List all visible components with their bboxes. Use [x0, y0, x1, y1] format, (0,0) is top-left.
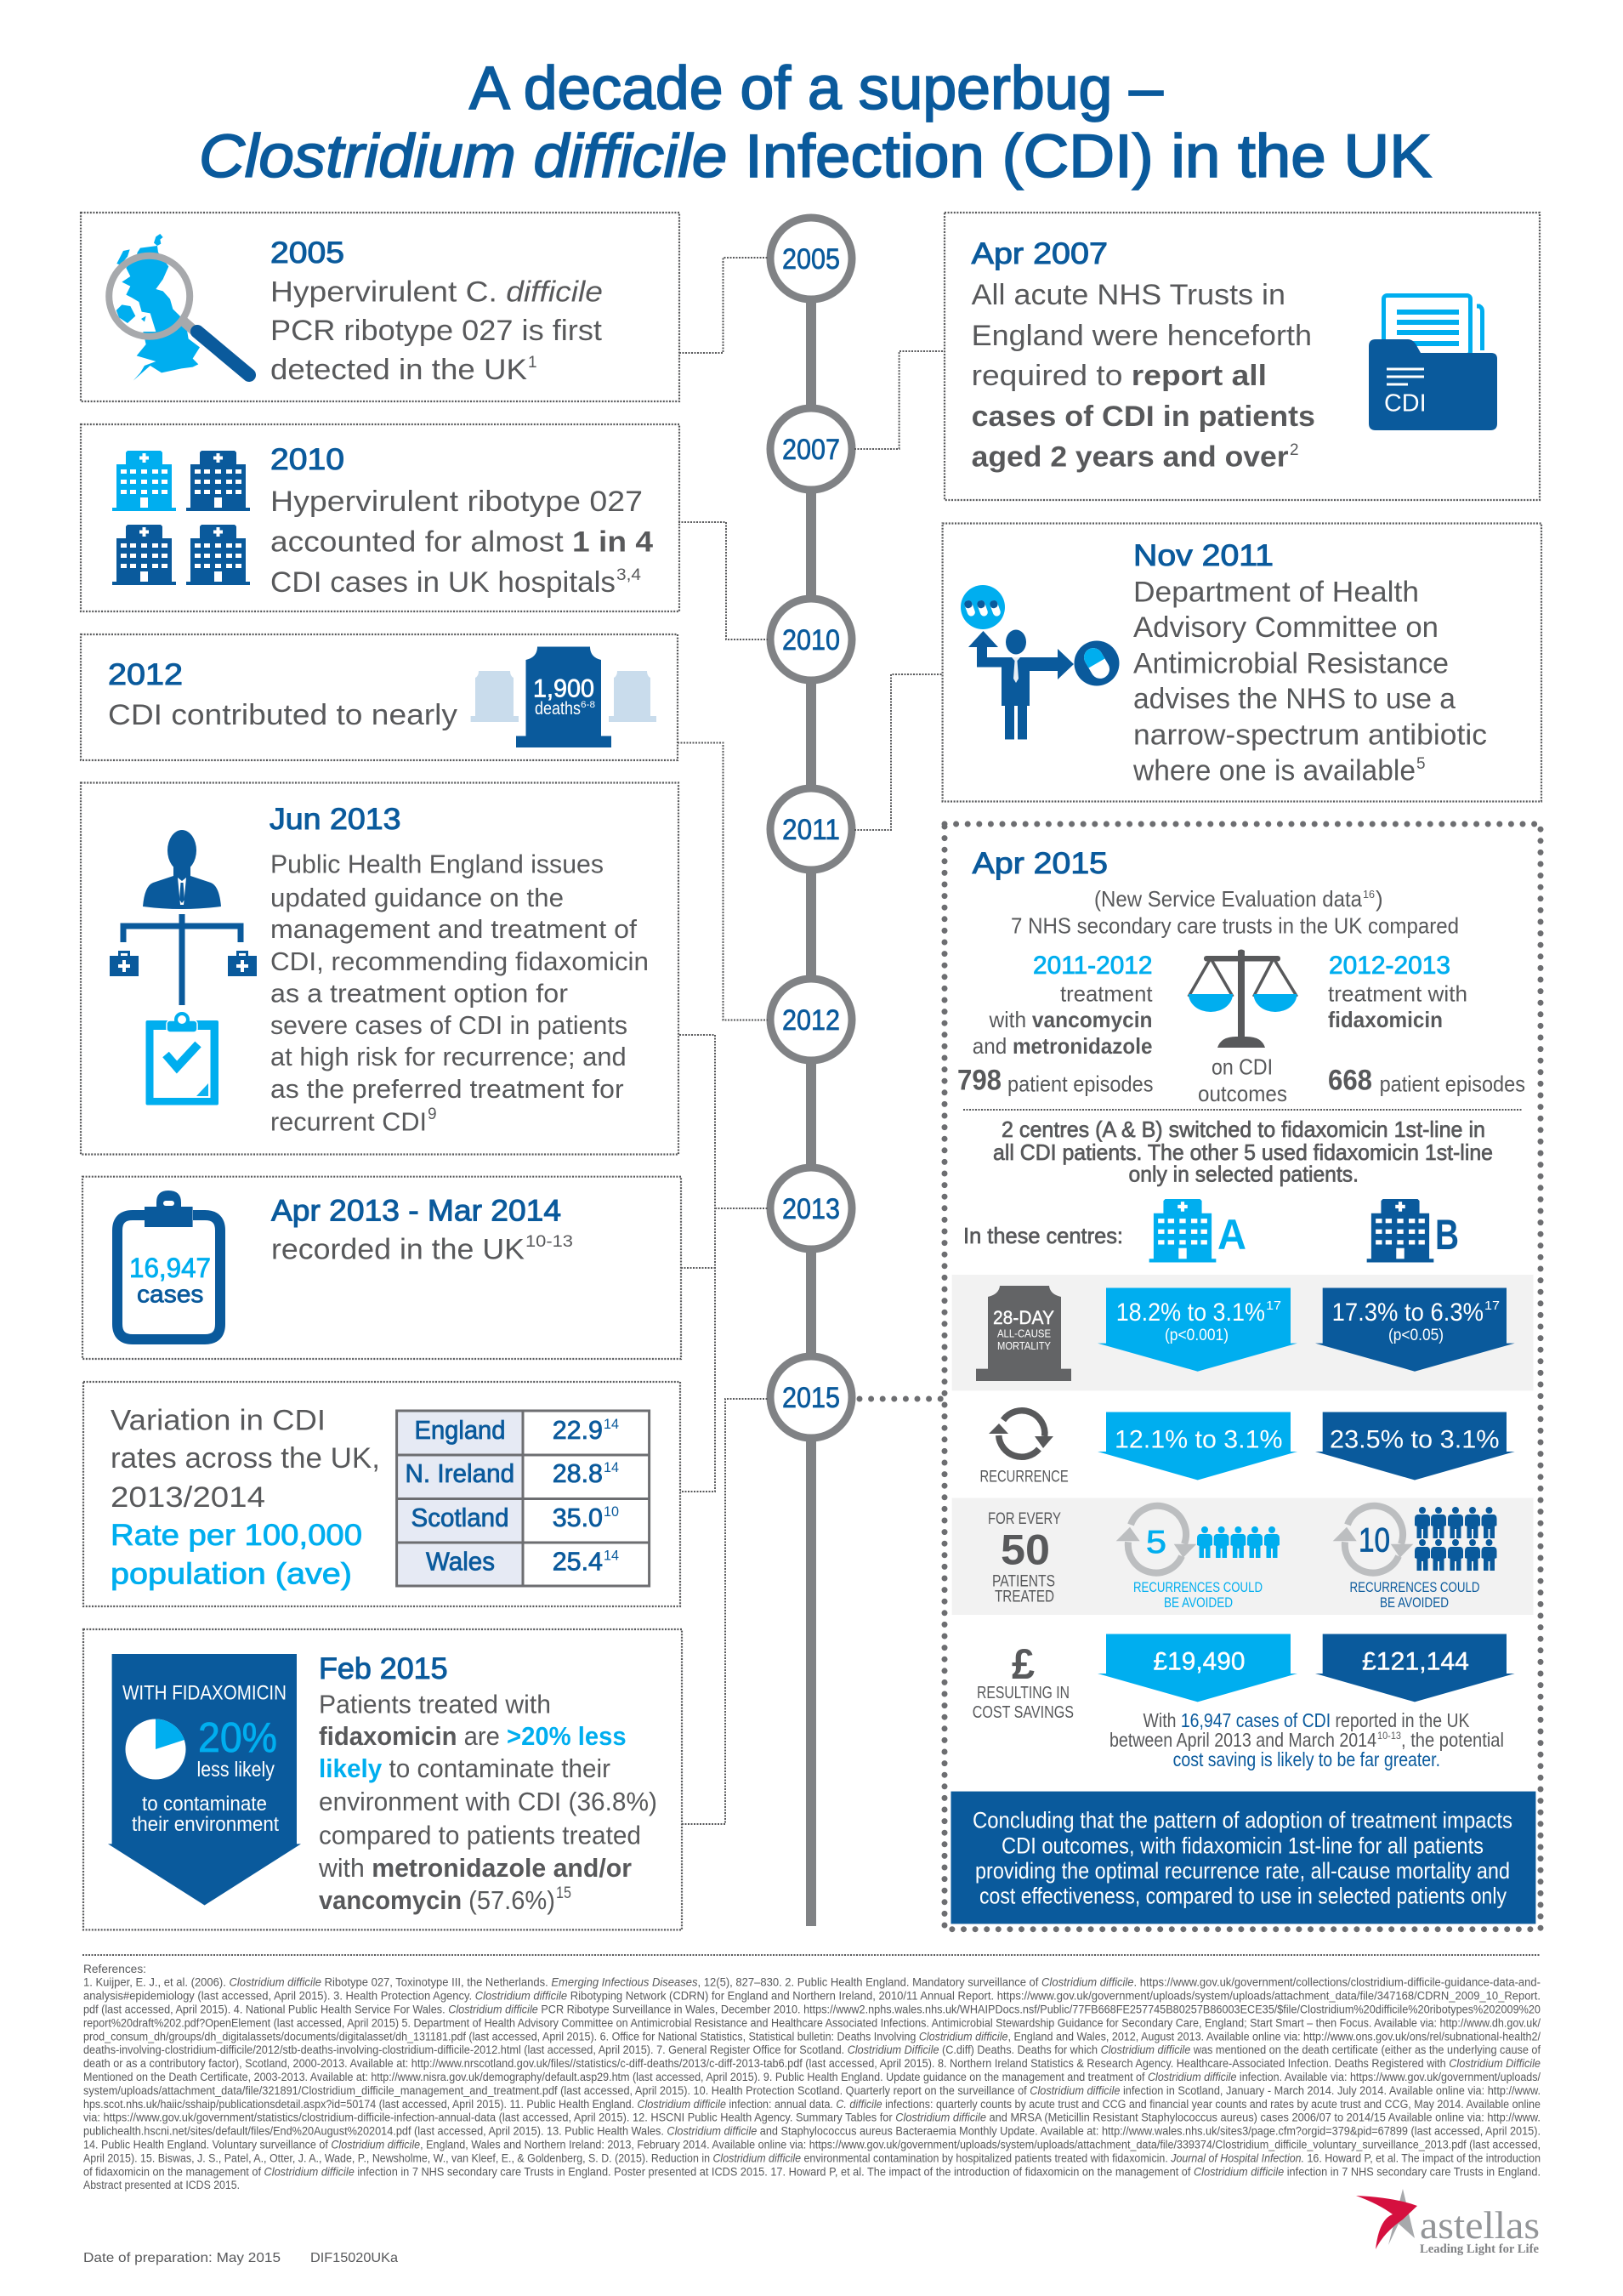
- heading: Apr 2007: Apr 2007: [972, 237, 1108, 270]
- text block: fidaxomicin are >20% less: [319, 1721, 627, 1751]
- panel: Jun 2013: [81, 782, 678, 1155]
- panel: variation in CDI rates: [83, 1382, 680, 1606]
- references: prod_consum_dh/groups/dh_digitalassets/documents/digitalasset/dh_131181.pdf (last accessed, April 2015). 6. Office for National Statistics, Statistical bulletin: Deaths Involving Clostridium difficile, England and Wales, 2012, August 2013. Available online via: http://www.ons.gov.uk/ons/rel/subnational-health2/: [83, 2030, 1541, 2043]
- references: 1. Kuijper, E. J., et al. (2006). Clostridium difficile Ribotype 027, Toxinotype III, the Netherlands. Emerging Infectious Diseases, 12(5), 827–830. 2. Public Health England. Mandatory surveillance of Clostridium difficile. https://www.gov.uk/government/collections/clostridium-difficile-guidance-data-and-: [83, 1976, 1541, 1989]
- arrow: centre B mortality: 17.3% to 6.3%: [1332, 1299, 1484, 1327]
- text block: CDI, recommending fidaxomicin: [270, 946, 649, 976]
- icon: hospital B: [1367, 1199, 1459, 1262]
- arrow: centre B recurrence: 23.5% to 3.1%: [1330, 1426, 1500, 1454]
- panel: 2010: [81, 424, 679, 611]
- label: recurrences could be avoided B: [1350, 1579, 1479, 1611]
- text block: All acute NHS Trusts in: [972, 279, 1285, 311]
- table: rates by nation: Scotland: [411, 1503, 508, 1532]
- heading: Apr 2013 - Mar 2014: Apr 2013 - Mar 2014: [271, 1195, 561, 1228]
- icon: hospital B: B: [1435, 1211, 1459, 1259]
- text: on CDI outcomes: outcomes: [1198, 1081, 1287, 1106]
- label: resulting in cost savings: RESULTING IN: [977, 1684, 1070, 1702]
- text: 2012-2013 comparator: fidaxomicin: [1328, 1007, 1443, 1032]
- icon: four hospitals: [112, 451, 250, 585]
- text block: Advisory Committee on: [1133, 611, 1439, 644]
- text block: Hypervirulent C. difficile: [270, 276, 603, 309]
- timeline: 2011: [782, 814, 840, 846]
- text: 2012-2013 comparator: [1328, 952, 1525, 1097]
- text block: 2013/2014: [111, 1481, 265, 1514]
- timeline: 2013: [782, 1193, 840, 1225]
- table: rates by nation: 28.8: [553, 1458, 603, 1488]
- text block: where one is available: [1132, 755, 1416, 787]
- icon: hospital A: A: [1217, 1211, 1246, 1259]
- table: rates by nation: [397, 1411, 650, 1586]
- text block: likely to contaminate their: [319, 1753, 610, 1783]
- callout: conclusion: Concluding that the pattern of adoption of treatment impacts: [973, 1808, 1512, 1833]
- text block: severe cases of CDI in patients: [270, 1010, 627, 1040]
- text block: cases of CDI in patients: [972, 401, 1315, 433]
- text: cost saving note: cost saving is likely to be far greater.: [1173, 1748, 1440, 1770]
- panel: Feb 2015: [83, 1629, 682, 1929]
- references: report%20draft%202.pdf?OpenElement (last accessed, April 2015) 5. Department of Health Advisory Committee on Antimicrobial Resistance and Healthcare Associated Infections. Antimicrobial Stewardship Guidance for Secondary Care, England; Start Smart – then Focus. Available via: http://www.dh.gov.uk/: [83, 2016, 1541, 2029]
- text block: compared to patients treated: [319, 1820, 641, 1850]
- table: rates by nation: 14: [604, 1459, 619, 1475]
- heading: Apr 2015: Apr 2015: [973, 847, 1108, 880]
- references: of fidaxomicin on the management of Clostridium difficile infection in 7 NHS secondary care Trusts in England. Poster presented at ICDS 2015. 17. Howard P, et al. The impact of the introduction of fidaxomicin on the management of Clostridium difficile infection in 7 NHS secondary care Trusts in England.: [83, 2165, 1541, 2178]
- icon: CDI folder: [1369, 296, 1497, 430]
- icon: hospital A: [1149, 1199, 1246, 1262]
- heading: Nov 2011: Nov 2011: [1133, 539, 1274, 572]
- references: April 2015). 15. Biswas, J. S., Patel, A., Otter, J. A., Wade, P., Newsholme, W., van Kleef, E., & Goldenberg, S. D. (2015). Reduction in Clostridium difficile environmental contamination by hospitalized patients treated with fidaxomicin. Journal of Hospital Infection. 16. Howard P, et al. The impact of the introduction: [83, 2151, 1541, 2164]
- icon: tombstones with 1,900 deaths: deaths: [535, 699, 581, 719]
- icon: tombstone: 28-DAY: [993, 1307, 1054, 1328]
- text: study description: ): [1376, 886, 1383, 912]
- icon: 10 recurrences avoided: [1333, 1506, 1496, 1573]
- arrow: centre B savings: £121,144: [1362, 1648, 1469, 1675]
- references: 14. Public Health England. Voluntary surveillance of Clostridium difficile, England, Wales and Northern Ireland: 2013, February 2014. Available online via: https://www.gov.uk/government/uploads/system/uploads/attachment_data/file/339374/Clostridium_difficile_voluntary_surveillance_2013.pdf (last accessed,: [83, 2138, 1541, 2151]
- callout: with fidaxomicin arrow: 20%: [198, 1715, 277, 1761]
- icon: tombstone: MORTALITY: [997, 1339, 1051, 1352]
- text: on CDI outcomes: [1198, 1054, 1287, 1106]
- text: for every 50 patients treated: TREATED: [995, 1588, 1054, 1606]
- references: [83, 1963, 1541, 2191]
- label: recurrences could be avoided B: BE AVOIDED: [1380, 1594, 1449, 1611]
- text: 2011-2012 comparator: 798: [957, 1064, 1002, 1096]
- row: recurrence: [979, 1411, 1515, 1486]
- arrow: centre A mortality: (p<0.001): [1165, 1327, 1229, 1344]
- references: Abstract presented at ICDS 2015.: [83, 2179, 240, 2191]
- text block: England were henceforth: [972, 320, 1312, 352]
- text block: CDI cases in UK hospitals: [270, 566, 616, 599]
- text block: detected in the UK: [270, 354, 527, 386]
- panel: Apr 2015 service evaluation: [945, 824, 1541, 1929]
- label: recurrences could be avoided A: RECURRENCES COULD: [1133, 1579, 1263, 1595]
- text: 2011-2012 comparator: treatment: [1060, 980, 1153, 1006]
- table: rates by nation: 14: [604, 1416, 619, 1432]
- text block: 15: [556, 1884, 571, 1902]
- label: resulting in cost savings: COST SAVINGS: [973, 1703, 1074, 1722]
- footer: date of preparation: Date of preparation: May 2015: [83, 2251, 281, 2265]
- references: pdf (last accessed, April 2015). 4. National Public Health Service For Wales. Clostridium difficile PCR Ribotype Surveillance in Wales, December 2010. https://www2.nphs.wales.nhs.uk/WHAIPDocs.nsf/Public/77FB668FE257745B80257B86003ECE35/$file/Clostridium%20difficile%20ribotypes%202009%20: [83, 2003, 1541, 2015]
- table: rates by nation: 14: [604, 1548, 619, 1563]
- text block: [111, 1405, 380, 1591]
- row: 28-day all-cause mortality: [952, 1275, 1534, 1390]
- label: recurrences could be avoided A: [1133, 1579, 1263, 1611]
- logo: astellas: astellas: [1420, 2203, 1540, 2247]
- text block: required to report all: [972, 360, 1267, 392]
- text block: 9: [428, 1105, 437, 1123]
- icon: man choosing between antibiotics: [961, 585, 1119, 740]
- text: for every 50 patients treated: PATIENTS: [992, 1573, 1055, 1590]
- text: study description: (New Service Evaluation data: [1094, 886, 1362, 912]
- text block: [270, 849, 649, 1137]
- table: rates by nation: 10: [604, 1503, 619, 1520]
- text: cost saving note: 10-13: [1377, 1730, 1401, 1742]
- text: cost saving note: With 16,947 cases of CDI reported in the UK: [1143, 1709, 1470, 1731]
- arrow: centre A mortality: 18.2% to 3.1%: [1116, 1299, 1265, 1327]
- text block: 1: [528, 354, 537, 372]
- icon: tombstone: ALL-CAUSE: [997, 1327, 1051, 1340]
- text: in these centres: In these centres:: [963, 1223, 1123, 1248]
- timeline: 2015: [782, 1382, 840, 1414]
- text: 2 centres switched: all CDI patients. The other 5 used fidaxomicin 1st-line: [993, 1139, 1493, 1165]
- text block: Patients treated with: [319, 1690, 551, 1719]
- timeline: 2007: [782, 434, 840, 466]
- text: for every 50 patients treated: 50: [1001, 1526, 1050, 1573]
- text block: as the preferred treatment for: [270, 1074, 624, 1104]
- text: 2012-2013 comparator: 668: [1328, 1064, 1372, 1096]
- icon: clipboard with 16,947 cases: 16,947: [129, 1253, 211, 1283]
- icon: tombstones with 1,900 deaths: 6-8: [581, 700, 595, 710]
- text: 2012-2013 comparator: patient episodes: [1380, 1071, 1525, 1097]
- title: [199, 55, 1432, 190]
- arrow: centre B mortality: 17: [1484, 1299, 1500, 1313]
- text: cost saving note: between April 2013 and March 2014: [1109, 1729, 1376, 1751]
- text block: [318, 1690, 657, 1915]
- arrow: centre A savings: £19,490: [1153, 1648, 1245, 1675]
- text: study description: 7 NHS secondary care trusts in the UK compared: [1011, 913, 1459, 939]
- text block: accounted for almost 1 in 4: [270, 526, 653, 558]
- text: recorded in the UK: recorded in the UK: [271, 1234, 525, 1266]
- table: rates by nation: 35.0: [553, 1503, 603, 1532]
- text block: recurrent CDI: [270, 1107, 427, 1137]
- text block: management and treatment of: [270, 914, 637, 944]
- text block: [1132, 577, 1487, 787]
- callout: conclusion: cost effectiveness, compared to use in selected patients only: [979, 1883, 1507, 1908]
- arrow: centre A mortality: [1098, 1287, 1297, 1372]
- text block: at high risk for recurrence; and: [270, 1042, 627, 1071]
- panel: Nov 2011: [943, 524, 1541, 801]
- timeline: 2012: [782, 1004, 840, 1037]
- text block: advises the NHS to use a: [1133, 683, 1456, 715]
- table: rates by nation: 22.9: [553, 1415, 603, 1445]
- timeline: 2005: [782, 243, 840, 276]
- text: for every 50 patients treated: FOR EVERY: [988, 1510, 1061, 1528]
- text: CDI contributed to nearly: CDI contributed to nearly: [108, 699, 457, 731]
- text block: rates across the UK,: [111, 1442, 380, 1475]
- table: rates by nation: Wales: [426, 1546, 495, 1577]
- text: 2011-2012 comparator: with vancomycin: [989, 1007, 1153, 1032]
- arrow: centre B mortality: [1315, 1287, 1515, 1372]
- text: 2 centres switched: [993, 1117, 1493, 1187]
- icon: recurrence cycle: [989, 1411, 1053, 1457]
- text block: vancomycin (57.6%): [319, 1885, 555, 1915]
- text: 2011-2012 comparator: and metronidazole: [973, 1033, 1153, 1059]
- arrow: centre A recurrence: 12.1% to 3.1%: [1115, 1426, 1282, 1454]
- icon: CDI folder: CDI: [1384, 389, 1427, 417]
- table: rates by nation: 25.4: [553, 1546, 603, 1577]
- logo: astellas: Leading Light for Life: [1420, 2242, 1539, 2256]
- icon: pound sign: £: [1012, 1640, 1035, 1688]
- logo: astellas: [1356, 2189, 1540, 2256]
- text: recorded in the UK: 10-13: [525, 1233, 573, 1251]
- table: rates by nation: England: [415, 1415, 505, 1445]
- table: rates by nation: N. Ireland: [405, 1458, 514, 1488]
- icon: 10 recurrences avoided: 10: [1359, 1522, 1390, 1560]
- callout: with fidaxomicin arrow: WITH FIDAXOMICIN: [122, 1682, 287, 1704]
- icon: balance scales: [1189, 949, 1297, 1048]
- text: 2 centres switched: 2 centres (A & B) switched to fidaxomicin 1st-line in: [1002, 1117, 1485, 1142]
- text: 2011-2012 comparator: [957, 952, 1153, 1097]
- label: resulting in cost savings: [973, 1684, 1074, 1722]
- references: system/uploads/attachment_data/file/321891/Clostridium_difficile_management_and_treatment.pdf (last accessed, April 2015). 10. Health Protection Scotland. Quarterly report on the surveillance of Clostridium difficile infection in Scotland, January - March 2014. July 2014. Available online via: http://www.: [83, 2084, 1541, 2097]
- heading: Feb 2015: Feb 2015: [319, 1652, 448, 1685]
- text block: 3,4: [616, 566, 641, 584]
- panel: Apr 2007: [945, 213, 1540, 500]
- references: analysis#epidemiology (last accessed, April 2015). 3. Health Protection Agency. Clostridium difficile Ribotyping Network (CDRN) for England and Northern Ireland, 2010/11 Annual Report. https://www.gov.uk/government/uploads/system/uploads/attachment_data/file/347168/CDRN_2009_10_Report.: [83, 1990, 1541, 2003]
- arrow: centre A mortality: 17: [1266, 1299, 1281, 1313]
- heading: Jun 2013: Jun 2013: [270, 803, 401, 836]
- text: study description: [1011, 886, 1459, 939]
- callout: conclusion: CDI outcomes, with fidaxomicin 1st-line for all patients: [1002, 1833, 1484, 1859]
- text block: as a treatment option for: [270, 979, 568, 1009]
- text block: Antimicrobial Resistance: [1133, 648, 1449, 680]
- text block: environment with CDI (36.8%): [319, 1787, 657, 1816]
- text block: Public Health England issues: [270, 849, 604, 879]
- icon: 5 recurrences avoided: 5: [1146, 1525, 1166, 1560]
- text block: 5: [1416, 755, 1426, 773]
- text: 2012-2013 comparator: treatment with: [1328, 980, 1467, 1006]
- text block: Hypervirulent ribotype 027: [270, 486, 643, 518]
- references: publichealth.hscni.net/sites/default/files/End%20August%202014.pdf (last accessed, April 2015). 13. Public Health Wales. Clostridium difficile and Staphylococcus aureus Bacteraemia Monthly Update. Available at: http://www.wales.nhs.uk/sites3/page.cfm?orgid=379&pid=67899 (last accessed, April 2015).: [83, 2125, 1541, 2138]
- arrow: centre B savings: [1315, 1634, 1515, 1702]
- callout: with fidaxomicin arrow: their environment: [132, 1813, 279, 1836]
- references: death or as a contributory factor), Scotland, 2000-2013. Available at: http://www.nrscotland.gov.uk/files//statistics/c-diff-deaths/2013/c-diff-2013-tab6.pdf (last accessed, April 2015). 8. Northern Ireland Statistics & Research Agency. Healthcare-Associated Infection. Deaths Registered with Clostridium Difficile: [83, 2057, 1541, 2070]
- text: 2011-2012 comparator: 2011-2012: [1033, 952, 1153, 980]
- text block: updated guidance on the: [270, 883, 564, 912]
- text: on CDI outcomes: on CDI: [1212, 1054, 1273, 1080]
- title: A decade of a superbug –: [469, 55, 1164, 122]
- icon: clipboard with 16,947 cases: [117, 1191, 220, 1339]
- callout: with fidaxomicin arrow: to contaminate: [142, 1793, 267, 1816]
- text block: aged 2 years and over: [972, 440, 1289, 473]
- text block: PCR ribotype 027 is first: [270, 315, 603, 347]
- arrow: centre B recurrence: [1315, 1412, 1515, 1480]
- row: recurrences avoided per 50 patients: [952, 1498, 1534, 1615]
- panel: 2012: [81, 634, 678, 760]
- icon: tombstones with 1,900 deaths: [471, 646, 656, 747]
- arrow: centre A recurrence: [1098, 1412, 1297, 1480]
- callout: conclusion: providing the optimal recurrence rate, all-cause mortality and: [975, 1858, 1510, 1884]
- text block: [270, 486, 653, 599]
- text: 2 centres switched: only in selected patients.: [1129, 1162, 1359, 1187]
- references: deaths-involving-clostridium-difficile/2012/stb-deaths-involving-clostridium-difficile-2012.html (last accessed, April 2015). 7. General Register Office for Scotland. Clostridium Difficile (C.diff) Deaths. Deaths for which Clostridium difficile was mentioned on the death certificate (either as the underlying cause of: [83, 2043, 1541, 2056]
- text: cost saving note: [1109, 1709, 1504, 1770]
- footer: date of preparation: DIF15020UKa: [310, 2251, 398, 2265]
- heading: 2012: 2012: [108, 658, 183, 691]
- arrow: centre B mortality: (p<0.05): [1388, 1327, 1444, 1344]
- references: via: https://www.gov.uk/government/statistics/clostridium-difficile-infection-annual-data (last accessed, April 2015). 12. HSCNI Public Health Agency. Summary Tables for Clostridium difficile and MRSA (Meticillin Resistant Staphylococcus aureus) cases 2006/07 to 2014/15 Available online via: http://www.: [83, 2111, 1541, 2124]
- references: hps.scot.nhs.uk/haiic/sshaip/publicationsdetail.aspx?id=50174 (last accessed, April 2015). 11. Public Health England. Clostridium difficile infection: annual data. C. difficile infections: quarterly counts by acute trust and CCG and financial year counts and rates by acute trust and CCG, May 2014. Available online: [83, 2098, 1541, 2111]
- icon: UK map under magnifying glass: [109, 234, 249, 381]
- icon: decision maker with bags and clipboard: [110, 830, 257, 1105]
- callout: conclusion: [951, 1792, 1535, 1924]
- text block: population (ave): [111, 1558, 352, 1591]
- text block: Rate per 100,000: [111, 1519, 362, 1552]
- panel: 2005: [81, 213, 679, 401]
- title: Clostridium difficile Infection (CDI) in the UK: [199, 123, 1432, 190]
- text: for every 50 patients treated: [988, 1510, 1061, 1606]
- text block: [972, 279, 1315, 473]
- label: recurrences could be avoided B: RECURRENCES COULD: [1350, 1579, 1479, 1595]
- text block: 2: [1290, 441, 1299, 459]
- callout: with fidaxomicin arrow: [108, 1654, 301, 1905]
- timeline: 2010: [782, 624, 840, 656]
- text block: Variation in CDI: [111, 1405, 326, 1437]
- text: 2012-2013 comparator: 2012-2013: [1329, 952, 1450, 980]
- footer: date of preparation: [83, 2251, 398, 2265]
- label: recurrence: RECURRENCE: [979, 1469, 1069, 1486]
- timeline: [770, 218, 852, 1926]
- text block: [270, 276, 603, 386]
- text: 2011-2012 comparator: patient episodes: [1007, 1071, 1153, 1097]
- icon: 5 recurrences avoided: [1116, 1506, 1280, 1573]
- heading: 2005: 2005: [270, 236, 344, 270]
- references: Mentioned on the Death Certificate, 2003-2013. Available at: http://www.nisra.gov.uk/demography/default.asp29.htm (last accessed, April 2015). 9. Public Health England. Update guidance on the management and treatment of Clostridium difficile infection. Available via: https://www.gov.uk/government/uploads/: [83, 2071, 1541, 2083]
- text block: with metronidazole and/or: [318, 1853, 632, 1883]
- icon: clipboard with 16,947 cases: cases: [137, 1282, 203, 1309]
- arrow: centre A savings: [1098, 1634, 1297, 1702]
- text block: narrow-spectrum antibiotic: [1133, 719, 1487, 752]
- references: References:: [83, 1963, 146, 1975]
- panel: Apr 2013 - Mar 2014: [82, 1177, 681, 1359]
- icon: tombstones with 1,900 deaths: 1,900: [533, 675, 594, 703]
- heading: 2010: 2010: [270, 443, 344, 476]
- text block: Department of Health: [1133, 577, 1419, 609]
- callout: with fidaxomicin arrow: less likely: [197, 1758, 275, 1782]
- row: cost savings: [973, 1634, 1515, 1770]
- icon: tombstone: [976, 1286, 1071, 1381]
- text: cost saving note: , the potential: [1401, 1729, 1504, 1751]
- label: recurrences could be avoided A: BE AVOIDED: [1164, 1594, 1233, 1611]
- text: study description: 16: [1363, 888, 1375, 901]
